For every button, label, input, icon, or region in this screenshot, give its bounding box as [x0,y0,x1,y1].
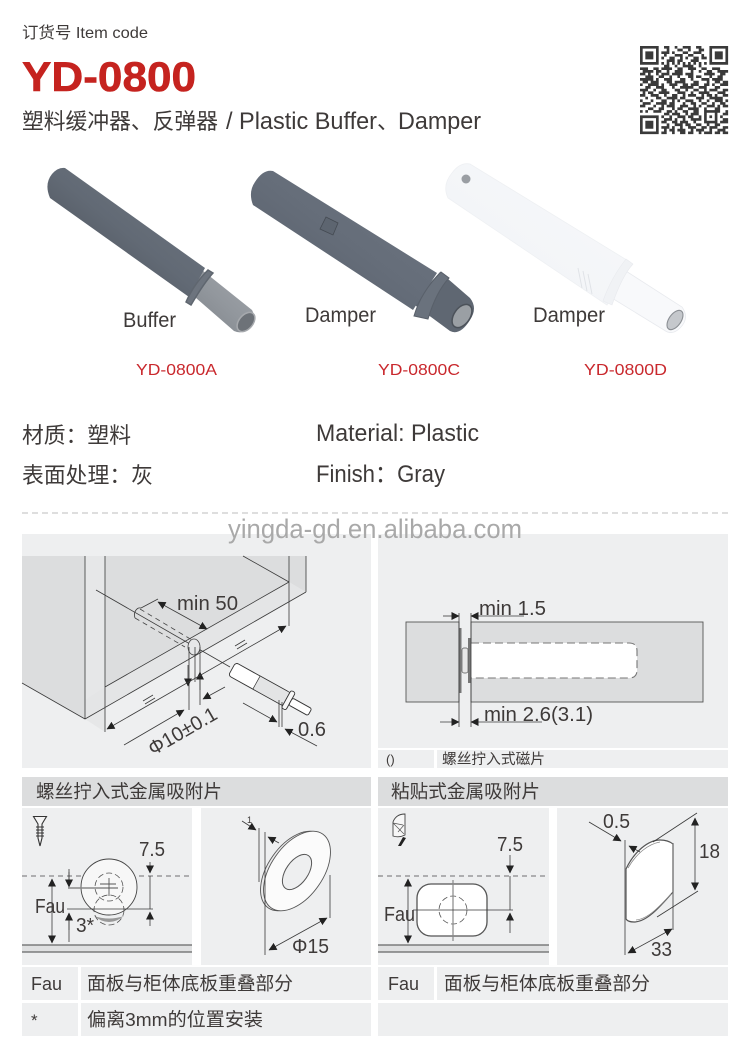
dimension: diameter 15: Φ15 [292,936,329,958]
icon: adhesive plate [393,814,406,846]
subtitle: 塑料缓冲器、反弹器 [22,109,218,134]
dimension: 1: 1 [247,815,252,825]
dimension: 3 star: 3* [76,915,94,937]
spec: material English: Material: Plastic [316,420,479,447]
subtitle: Damper [398,108,481,135]
label: Damper C: Damper [305,304,376,327]
dimension: min 50: min 50 [177,593,238,615]
product D: white damper [446,164,686,333]
table row: Fau right: 面板与柜体底板重叠部分 [444,973,650,994]
table row: Fau right: Fau [388,974,419,994]
table row: star note: 偏离3mm的位置安装 [87,1009,263,1030]
title: product code: YD-0800 [22,53,196,100]
dimension: Fau: Fau [384,904,415,926]
product C: damper [251,171,476,332]
table row: star note: * [31,1011,38,1030]
table row: Fau right [378,967,728,1000]
panel: adhesive plate dimensions [557,808,728,965]
watermark: yingda-gd.en.alibaba.com [228,514,522,544]
dimension: 33: 33 [651,939,672,961]
table row: Fau left [22,967,371,1000]
table row: empty right [378,1003,728,1036]
section heading: adhesive metal plate [378,777,728,806]
section heading: screw-in metal plate [22,777,371,806]
label: Damper D: Damper [533,304,605,327]
dimension: min 1.5: min 1.5 [479,598,546,620]
QR code [640,46,728,134]
caption row: screw-in magnet: () [386,752,395,767]
model code C: YD-0800C [378,362,460,379]
model code A: YD-0800A [136,362,217,379]
model code D: YD-0800D [584,362,667,379]
dimension: 18: 18 [699,841,720,863]
dimension: diameter 10: Φ10±0.1 [144,703,221,760]
label: Buffer: Buffer [123,309,176,332]
table row: star note [22,1003,371,1036]
panel: section view [378,534,728,748]
header: item code label: 订货号 Item code [22,24,148,42]
product A: buffer [47,168,258,335]
panel: screw-in plate position [22,808,192,965]
dimension: 7.5: 7.5 [497,834,523,856]
subtitle: / Plastic Buffer [226,108,377,135]
subtitle: 、 [377,109,399,134]
spec: finish English: Finish：Gray [316,461,445,488]
small damper illustration [227,660,315,721]
panel: adhesive plate position [378,808,549,965]
caption row: screw-in magnet: 螺丝拧入式磁片 [442,751,545,768]
dimension: min 2.6 (3.1): min 2.6(3.1) [484,704,593,726]
dimension: 7.5: 7.5 [139,839,165,861]
dimension: Fau: Fau [35,896,65,918]
section heading: adhesive metal plate: 粘贴式金属吸附片 [391,781,540,802]
subtitle [22,108,481,135]
panel: drilling diagram [22,534,371,768]
spec: finish Chinese: 表面处理：灰 [22,463,153,488]
panel: washer dimensions [201,808,371,965]
table row: Fau left: Fau [31,974,62,994]
dimension: 0.6: 0.6 [298,719,326,741]
table row: Fau left: 面板与柜体底板重叠部分 [87,973,293,994]
icon: screw [34,816,46,846]
spec: material Chinese: 材质：塑料 [22,423,131,448]
dimension: 0.5: 0.5 [603,811,630,833]
caption row: screw-in magnet [378,750,728,768]
section heading: screw-in metal plate: 螺丝拧入式金属吸附片 [36,781,222,802]
